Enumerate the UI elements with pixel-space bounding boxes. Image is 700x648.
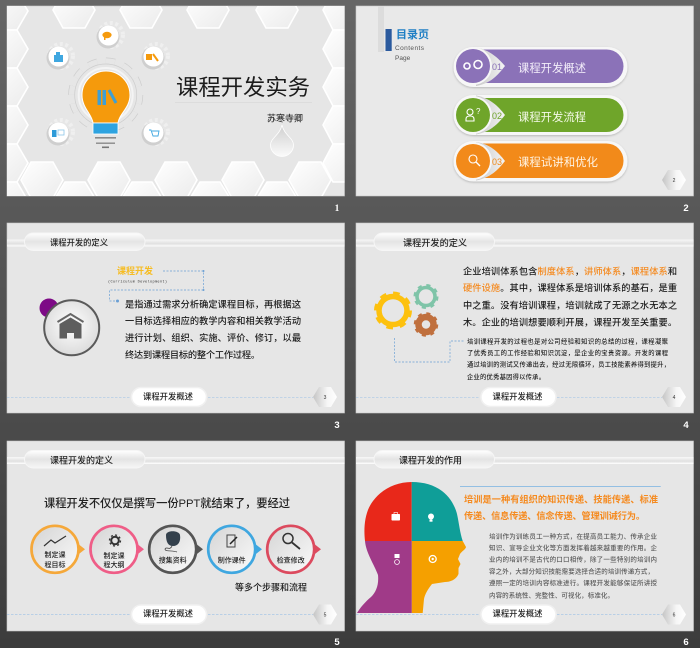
body text: 容之外，大部分知识技能需要选择合适的培训传递方式， (489, 566, 654, 576)
pill 1 (454, 47, 628, 87)
heading: 目录页 (396, 28, 429, 41)
slide number 5: 5 (334, 637, 340, 648)
body text: 内容的系统性、完整性、可视化，标准化。 (489, 591, 614, 600)
small text (467, 336, 670, 381)
footer: 5 (324, 612, 327, 618)
body text: 培训作为训练员工一种方式，在提高员工能力、传承企业 (489, 532, 658, 540)
body text: 是指通过需求分析确定课程目标，再根据这 (125, 298, 301, 310)
icon: purple dot (40, 298, 58, 318)
slide number 4: 4 (683, 420, 689, 431)
panel: slide 5 steps (7, 441, 344, 631)
footer: 课程开发概述 (492, 608, 543, 618)
step 5: 检查修改 (277, 556, 305, 564)
tab heading (374, 450, 494, 468)
footer: 课程开发概述 (492, 392, 543, 402)
step 3: 搜集资料 (159, 556, 187, 564)
main text: 中之重。没有培训课程，培训就成了无源之水无本之 (463, 300, 677, 310)
footer: 6 (673, 612, 676, 618)
icon: satellite cart (142, 120, 168, 146)
pill 2: 课程开发流程 (518, 110, 586, 124)
tab heading: 课程开发的定义 (403, 237, 467, 248)
footer: 4 (673, 395, 676, 401)
page badge: 2 (673, 178, 676, 184)
footer: 课程开发概述 (143, 392, 194, 402)
pill 3 (454, 141, 628, 182)
pill 2: ? (476, 107, 481, 116)
icon: target (429, 556, 436, 562)
small text: 企业的优秀基因得以传承。 (467, 372, 545, 381)
step 1 (32, 526, 85, 573)
slide number 6: 6 (683, 637, 689, 648)
heading marker (386, 29, 392, 51)
highlighted text: 培训是一种有组织的知识传递、技能传递、标准 (464, 494, 658, 504)
step 2: 程大纲 (104, 560, 124, 569)
title: 课程开发实务 (176, 75, 310, 100)
small text: 通过培训的测试又传递出去，经过无限循环，员工技能素养得到提升， (467, 360, 670, 369)
icon: brown gear (415, 314, 437, 336)
slide number 2: 2 (683, 203, 689, 214)
step 5 (267, 526, 321, 573)
body text: 业内的培训不是古代的口口相传，除了一些特别的培训内 (489, 555, 657, 564)
highlighted text: 传递、信息传递、信念传递、管理训诫行为。 (464, 510, 645, 521)
footer: 课程开发概述 (143, 608, 194, 618)
tab heading (374, 233, 494, 250)
panel: slide 1 cover (6, 6, 345, 196)
pill 1: 01 (492, 62, 502, 72)
body text: 遵照一定的培训内容标准进行。课程开发能够保证所讲授 (489, 578, 658, 587)
pill 3: 课程试讲和优化 (518, 155, 598, 169)
footer (356, 604, 686, 624)
step 2 (90, 526, 144, 573)
main text (463, 266, 677, 328)
step 2: 制定课 (104, 551, 124, 560)
head diagram (357, 482, 466, 613)
highlighted text (464, 494, 658, 521)
step 1: 程目标 (44, 560, 66, 569)
step 1: 制定课 (44, 550, 66, 559)
panel: slide 4 definition (356, 223, 694, 413)
pill 2 (454, 95, 628, 135)
pill 3: 03 (492, 157, 502, 167)
pill 2: 02 (492, 111, 502, 121)
icon: briefcase (392, 512, 400, 520)
icon: satellite screen (46, 120, 73, 146)
step 4: 制作课件 (218, 556, 246, 564)
footer (7, 604, 337, 624)
tab heading (24, 450, 145, 468)
panel: slide 2 contents: Page (395, 55, 411, 62)
lead sentence: 课程开发不仅仅是撰写一份PPT就结束了，要经过 (44, 496, 290, 510)
main text: 木。企业的培训想要顺利开展，课程开发至关重要。 (463, 316, 677, 328)
tab heading: 课程开发的定义 (50, 238, 109, 248)
icon: teal gear (415, 286, 437, 308)
footer (7, 387, 337, 407)
body text (125, 298, 301, 360)
icon: water drop (270, 125, 294, 156)
hexagon border pattern (7, 6, 344, 196)
author: 苏寒寺卿 (267, 112, 303, 124)
panel: slide 3 definition (7, 223, 344, 413)
main text: 企业培训体系包含制度体系，讲师体系，课程体系和 (463, 266, 677, 276)
icon: bulb (428, 514, 434, 522)
step 4 (208, 526, 262, 573)
footer (356, 387, 686, 407)
tab heading: 课程开发的作用 (399, 454, 462, 466)
main text: 硬件设施。其中，课程体系是培训体系的基石，是重 (463, 282, 677, 293)
icon: light bulb with gear (72, 61, 140, 148)
tab heading: 课程开发的定义 (50, 454, 113, 466)
term heading: 课程开发 (117, 265, 153, 276)
closing note: 等多个步骤和流程 (235, 582, 307, 592)
subheading: Contents (395, 45, 425, 52)
dashed connector (394, 338, 465, 362)
body text: 一目标选择相应的教学内容和相关教学活动 (125, 315, 301, 326)
body text (489, 532, 658, 600)
icon: home (44, 300, 99, 355)
dashed connector (110, 270, 204, 302)
tab heading (24, 233, 145, 250)
footer: 3 (324, 395, 327, 401)
small text: 了优秀员工的工作经验和知识沉淀，是企业的宝贵资源。开发的课程 (467, 348, 669, 357)
page badge (662, 170, 686, 190)
icon: satellite chat (96, 23, 123, 48)
slide number 1: 1 (335, 204, 340, 214)
body text: 知识、宣导企业文化等方面发挥着越来越重要的作用。企 (489, 543, 658, 552)
icon: satellite tools (142, 44, 168, 70)
step 3 (149, 526, 203, 573)
icon: satellite building (46, 44, 73, 70)
icon: medal (394, 554, 400, 564)
panel: slide 6 role (356, 441, 694, 631)
small text: 培训课程开发的过程也是对公司经验和知识的总结的过程，课程凝聚 (467, 336, 669, 346)
panel: slide 2 contents (356, 6, 694, 196)
icon: yellow gear (376, 294, 410, 328)
body text: 进行计划、组织、实施、评价、修订，以最 (125, 332, 301, 343)
body text: 终达到课程目标的整个工作过程。 (125, 349, 260, 360)
term english: (Curriculum Development) (108, 280, 167, 284)
rule (460, 486, 661, 487)
slide number 3: 3 (334, 420, 340, 431)
pill 1: 课程开发概述 (518, 61, 586, 75)
